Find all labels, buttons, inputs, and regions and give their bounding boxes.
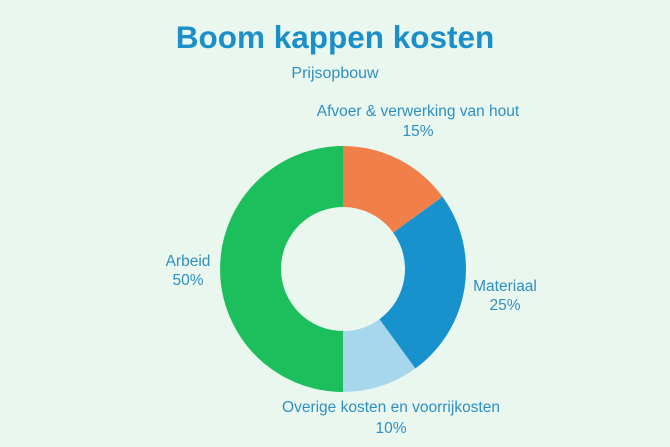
label: arbeid (166, 253, 210, 289)
label: overige (282, 399, 500, 437)
subtitle: Prijsopbouw (291, 65, 379, 82)
label: overige: 10% (375, 420, 407, 437)
segment: arbeid 50% (220, 146, 343, 392)
segment: overige 10% (343, 319, 415, 392)
label: afvoer: Afvoer & verwerking van hout (317, 103, 519, 120)
label: materiaal (473, 278, 537, 314)
segment: afvoer 15% (343, 146, 442, 233)
label: overige: Overige kosten en voorrijkosten (282, 399, 500, 416)
label: arbeid: Arbeid (166, 253, 210, 270)
label: arbeid: 50% (172, 272, 204, 289)
label: afvoer: 15% (402, 123, 434, 140)
label: materiaal: Materiaal (473, 278, 537, 295)
label: afvoer (316, 103, 520, 140)
segment: materiaal 25% (379, 197, 466, 368)
label: materiaal: 25% (489, 297, 521, 314)
title: Boom kappen kosten (176, 19, 494, 55)
